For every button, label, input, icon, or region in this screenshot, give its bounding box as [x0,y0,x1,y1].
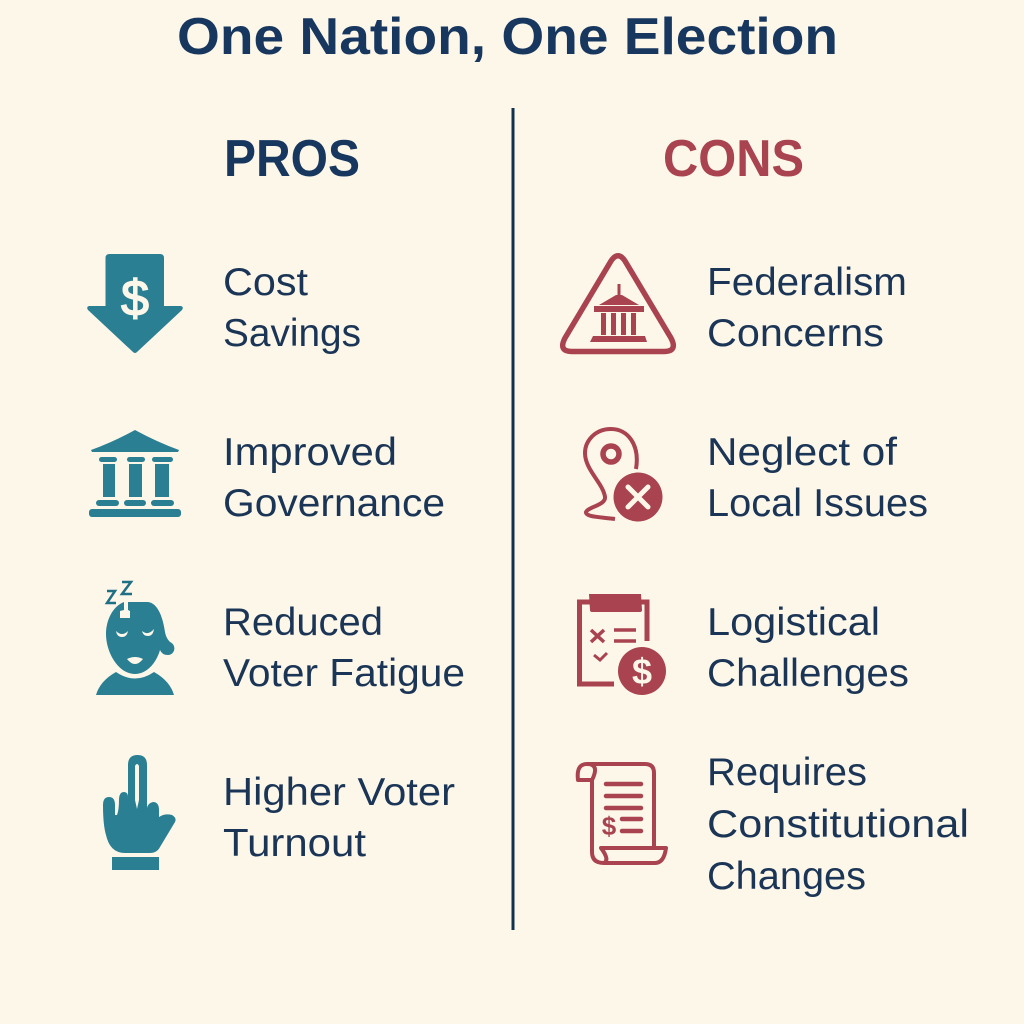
text: logistical challenges [707,601,909,695]
text: reduced voter fatigue: Reduced [223,601,383,644]
text: neglect of local issues [707,431,928,525]
icon: clipboard checklist: $ [632,651,652,692]
text: improved governance: Improved [223,431,397,474]
heading: pros: PROS [224,130,360,188]
text: reduced voter fatigue: Voter Fatigue [223,652,465,695]
icon: cost savings arrow [87,254,183,353]
text: federalism concerns [707,261,907,355]
icon: cost savings arrow: $ [121,270,149,326]
text: federalism concerns: Federalism [707,261,907,304]
panel: pros [87,130,465,870]
heading: cons: CONS [663,130,804,188]
text: higher voter turnout [223,771,455,865]
icon: federalism warning triangle [563,256,673,352]
icon: clipboard checklist [580,594,666,695]
text: higher voter turnout: Turnout [223,822,366,865]
title: One Nation, One Election [177,8,838,66]
panel: cons [563,130,969,898]
text: cost savings: Savings [223,312,361,355]
text: higher voter turnout: Higher Voter [223,771,455,814]
icon: sleepy voter [96,582,174,695]
text: requires constitutional changes: Constitutional [707,803,969,846]
text: improved governance [223,431,445,525]
icon: raised hand [103,755,176,870]
text: improved governance: Governance [223,482,445,525]
icon: government building [89,430,181,517]
icon: constitution scroll: $ [602,811,617,841]
text: cost savings [223,261,361,355]
text: logistical challenges: Logistical [707,601,880,644]
text: neglect of local issues: Local Issues [707,482,928,525]
text: requires constitutional changes [707,751,969,898]
text: neglect of local issues: Neglect of [707,431,897,474]
text: reduced voter fatigue [223,601,465,695]
text: requires constitutional changes: Requires [707,751,867,794]
icon: constitution scroll [578,764,666,863]
text: federalism concerns: Concerns [707,312,884,355]
icon: location pin with x [585,429,662,522]
text: requires constitutional changes: Changes [707,855,866,898]
text: logistical challenges: Challenges [707,652,909,695]
text: cost savings: Cost [223,261,308,304]
divider [512,108,514,930]
